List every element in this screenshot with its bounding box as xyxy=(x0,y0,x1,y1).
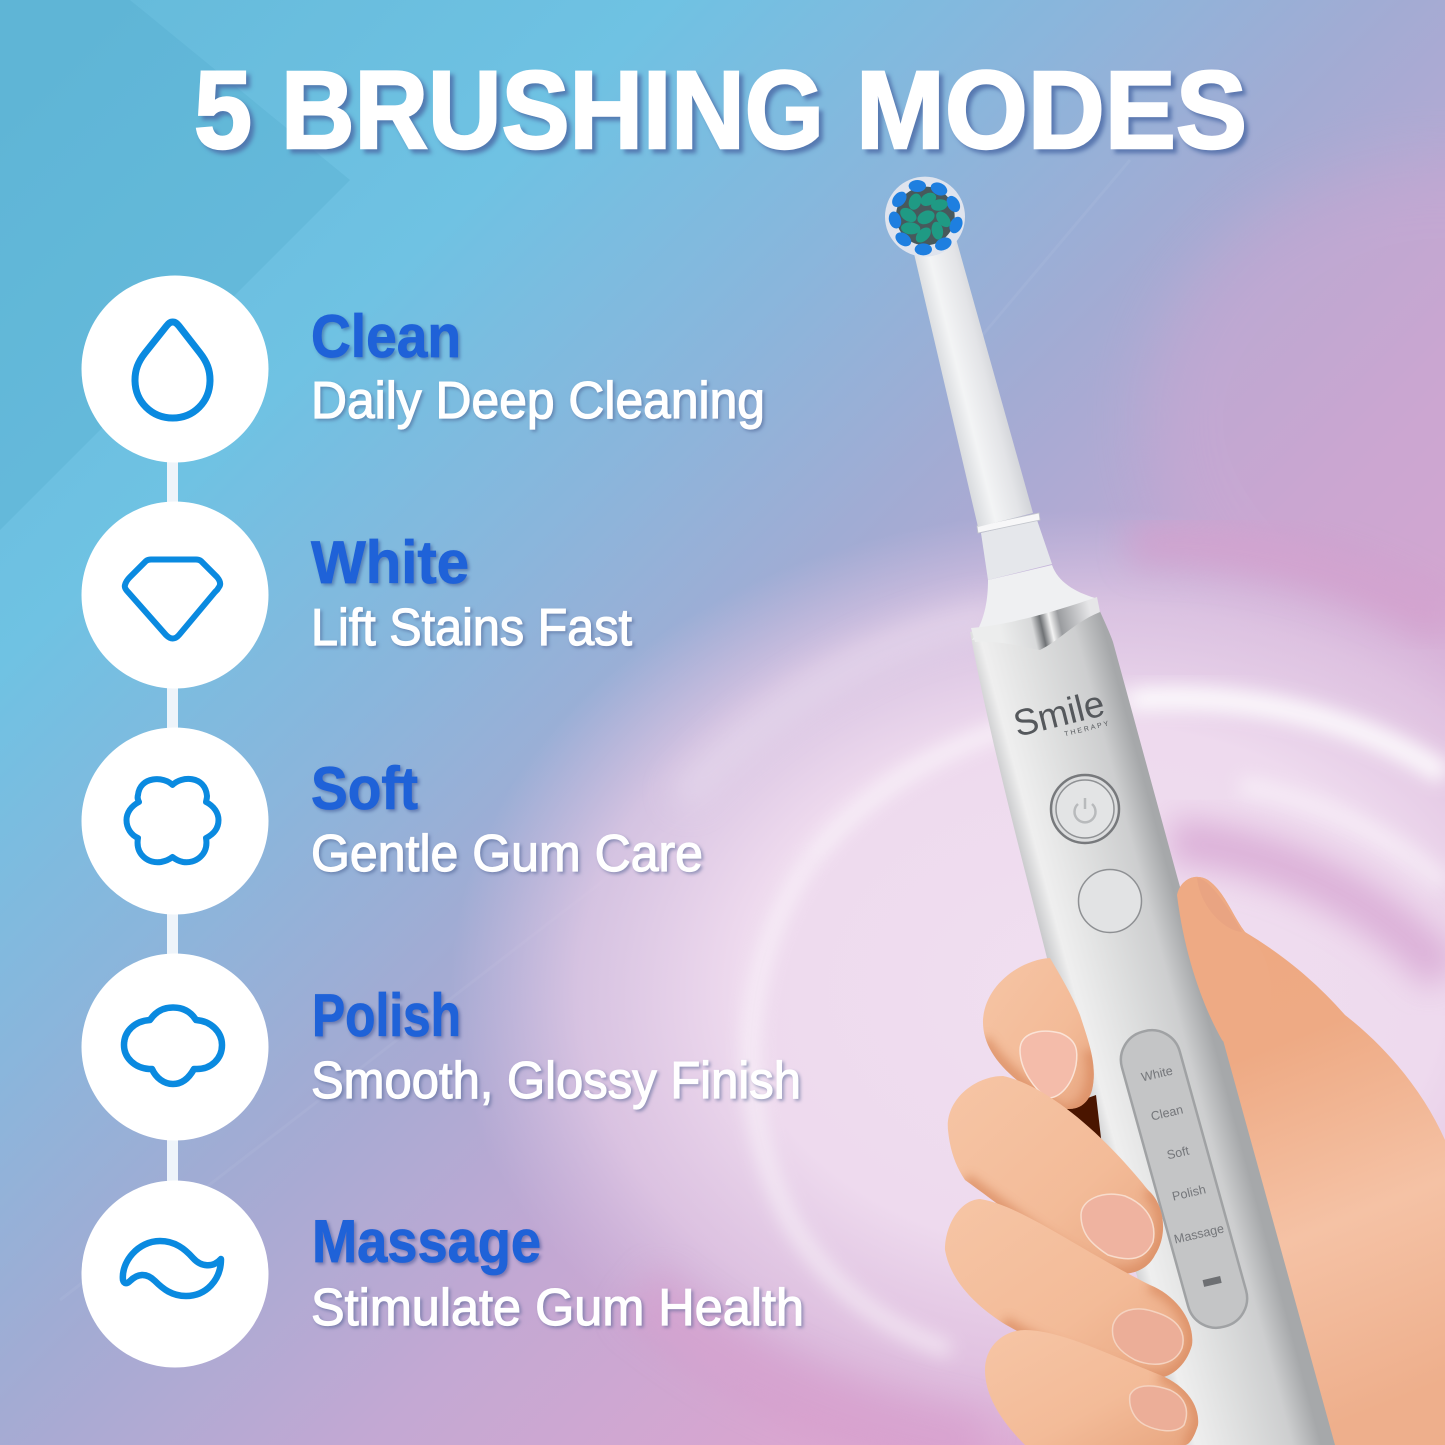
label: clean: Clean xyxy=(311,303,461,370)
thumb xyxy=(1177,877,1271,1050)
power button xyxy=(1051,775,1119,843)
nail: middle xyxy=(1081,1194,1154,1259)
logo: Smile xyxy=(1009,683,1109,745)
hand back: palm xyxy=(1177,877,1445,1445)
mode panel: Soft xyxy=(1166,1144,1191,1162)
shoulder xyxy=(972,565,1098,640)
icon: flower cloud xyxy=(126,779,218,862)
label: massage: Massage xyxy=(312,1208,541,1275)
title: MODES xyxy=(856,49,1247,172)
icon: diamond xyxy=(125,560,220,638)
shadow between fingers xyxy=(1060,1095,1103,1155)
blue bristles xyxy=(887,180,965,255)
mode panel: Massage xyxy=(1173,1221,1225,1247)
ring xyxy=(977,513,1040,533)
brush head xyxy=(885,177,965,257)
label: soft: Soft xyxy=(311,755,418,822)
nail: little xyxy=(1130,1386,1186,1431)
icon: water drop xyxy=(135,322,210,418)
mode: polish xyxy=(82,954,801,1140)
chrome band xyxy=(971,597,1100,650)
icon circle: clean xyxy=(82,276,268,462)
label: white: White xyxy=(311,529,469,596)
finger: index xyxy=(983,958,1094,1112)
mode: massage xyxy=(82,1180,804,1368)
mode: soft xyxy=(82,728,703,914)
mode panel: Clean xyxy=(1150,1102,1185,1123)
finger: middle xyxy=(948,1076,1163,1274)
mode panel xyxy=(1114,1024,1254,1334)
description: massage: Stimulate Gum Health xyxy=(311,1279,804,1337)
neck xyxy=(912,235,1033,527)
mode: clean xyxy=(82,276,765,462)
connector line xyxy=(167,450,178,1200)
icon: wave xyxy=(123,1241,221,1296)
swirl xyxy=(450,510,1445,1445)
mode: white xyxy=(82,502,633,688)
handle xyxy=(970,600,1335,1445)
logo: THERAPY xyxy=(1064,720,1111,738)
description: white: Lift Stains Fast xyxy=(311,599,633,657)
description: polish: Smooth, Glossy Finish xyxy=(311,1052,801,1110)
icon: cloud xyxy=(124,1008,222,1084)
mode panel: Polish xyxy=(1171,1182,1207,1204)
icon circle: polish xyxy=(82,954,268,1140)
finger: ring xyxy=(945,1199,1192,1379)
hand xyxy=(945,877,1271,1445)
description: clean: Daily Deep Cleaning xyxy=(311,372,765,430)
finger: little xyxy=(985,1330,1198,1445)
title: 5 xyxy=(194,49,252,172)
green bristles xyxy=(898,190,953,245)
title xyxy=(194,49,1247,172)
title: BRUSHING xyxy=(281,49,824,172)
collar xyxy=(981,520,1052,580)
nail: ring xyxy=(1112,1309,1183,1364)
icon circle: massage xyxy=(82,1180,268,1368)
toothbrush xyxy=(885,177,1335,1445)
icon circle: soft xyxy=(82,728,268,914)
mode panel: White xyxy=(1140,1064,1174,1084)
nail: index xyxy=(1020,1031,1077,1098)
description: soft: Gentle Gum Care xyxy=(311,825,703,883)
label: polish: Polish xyxy=(312,982,461,1049)
nail: thumb xyxy=(1197,878,1242,932)
mode button xyxy=(1078,870,1142,932)
icon circle: white xyxy=(82,502,268,688)
